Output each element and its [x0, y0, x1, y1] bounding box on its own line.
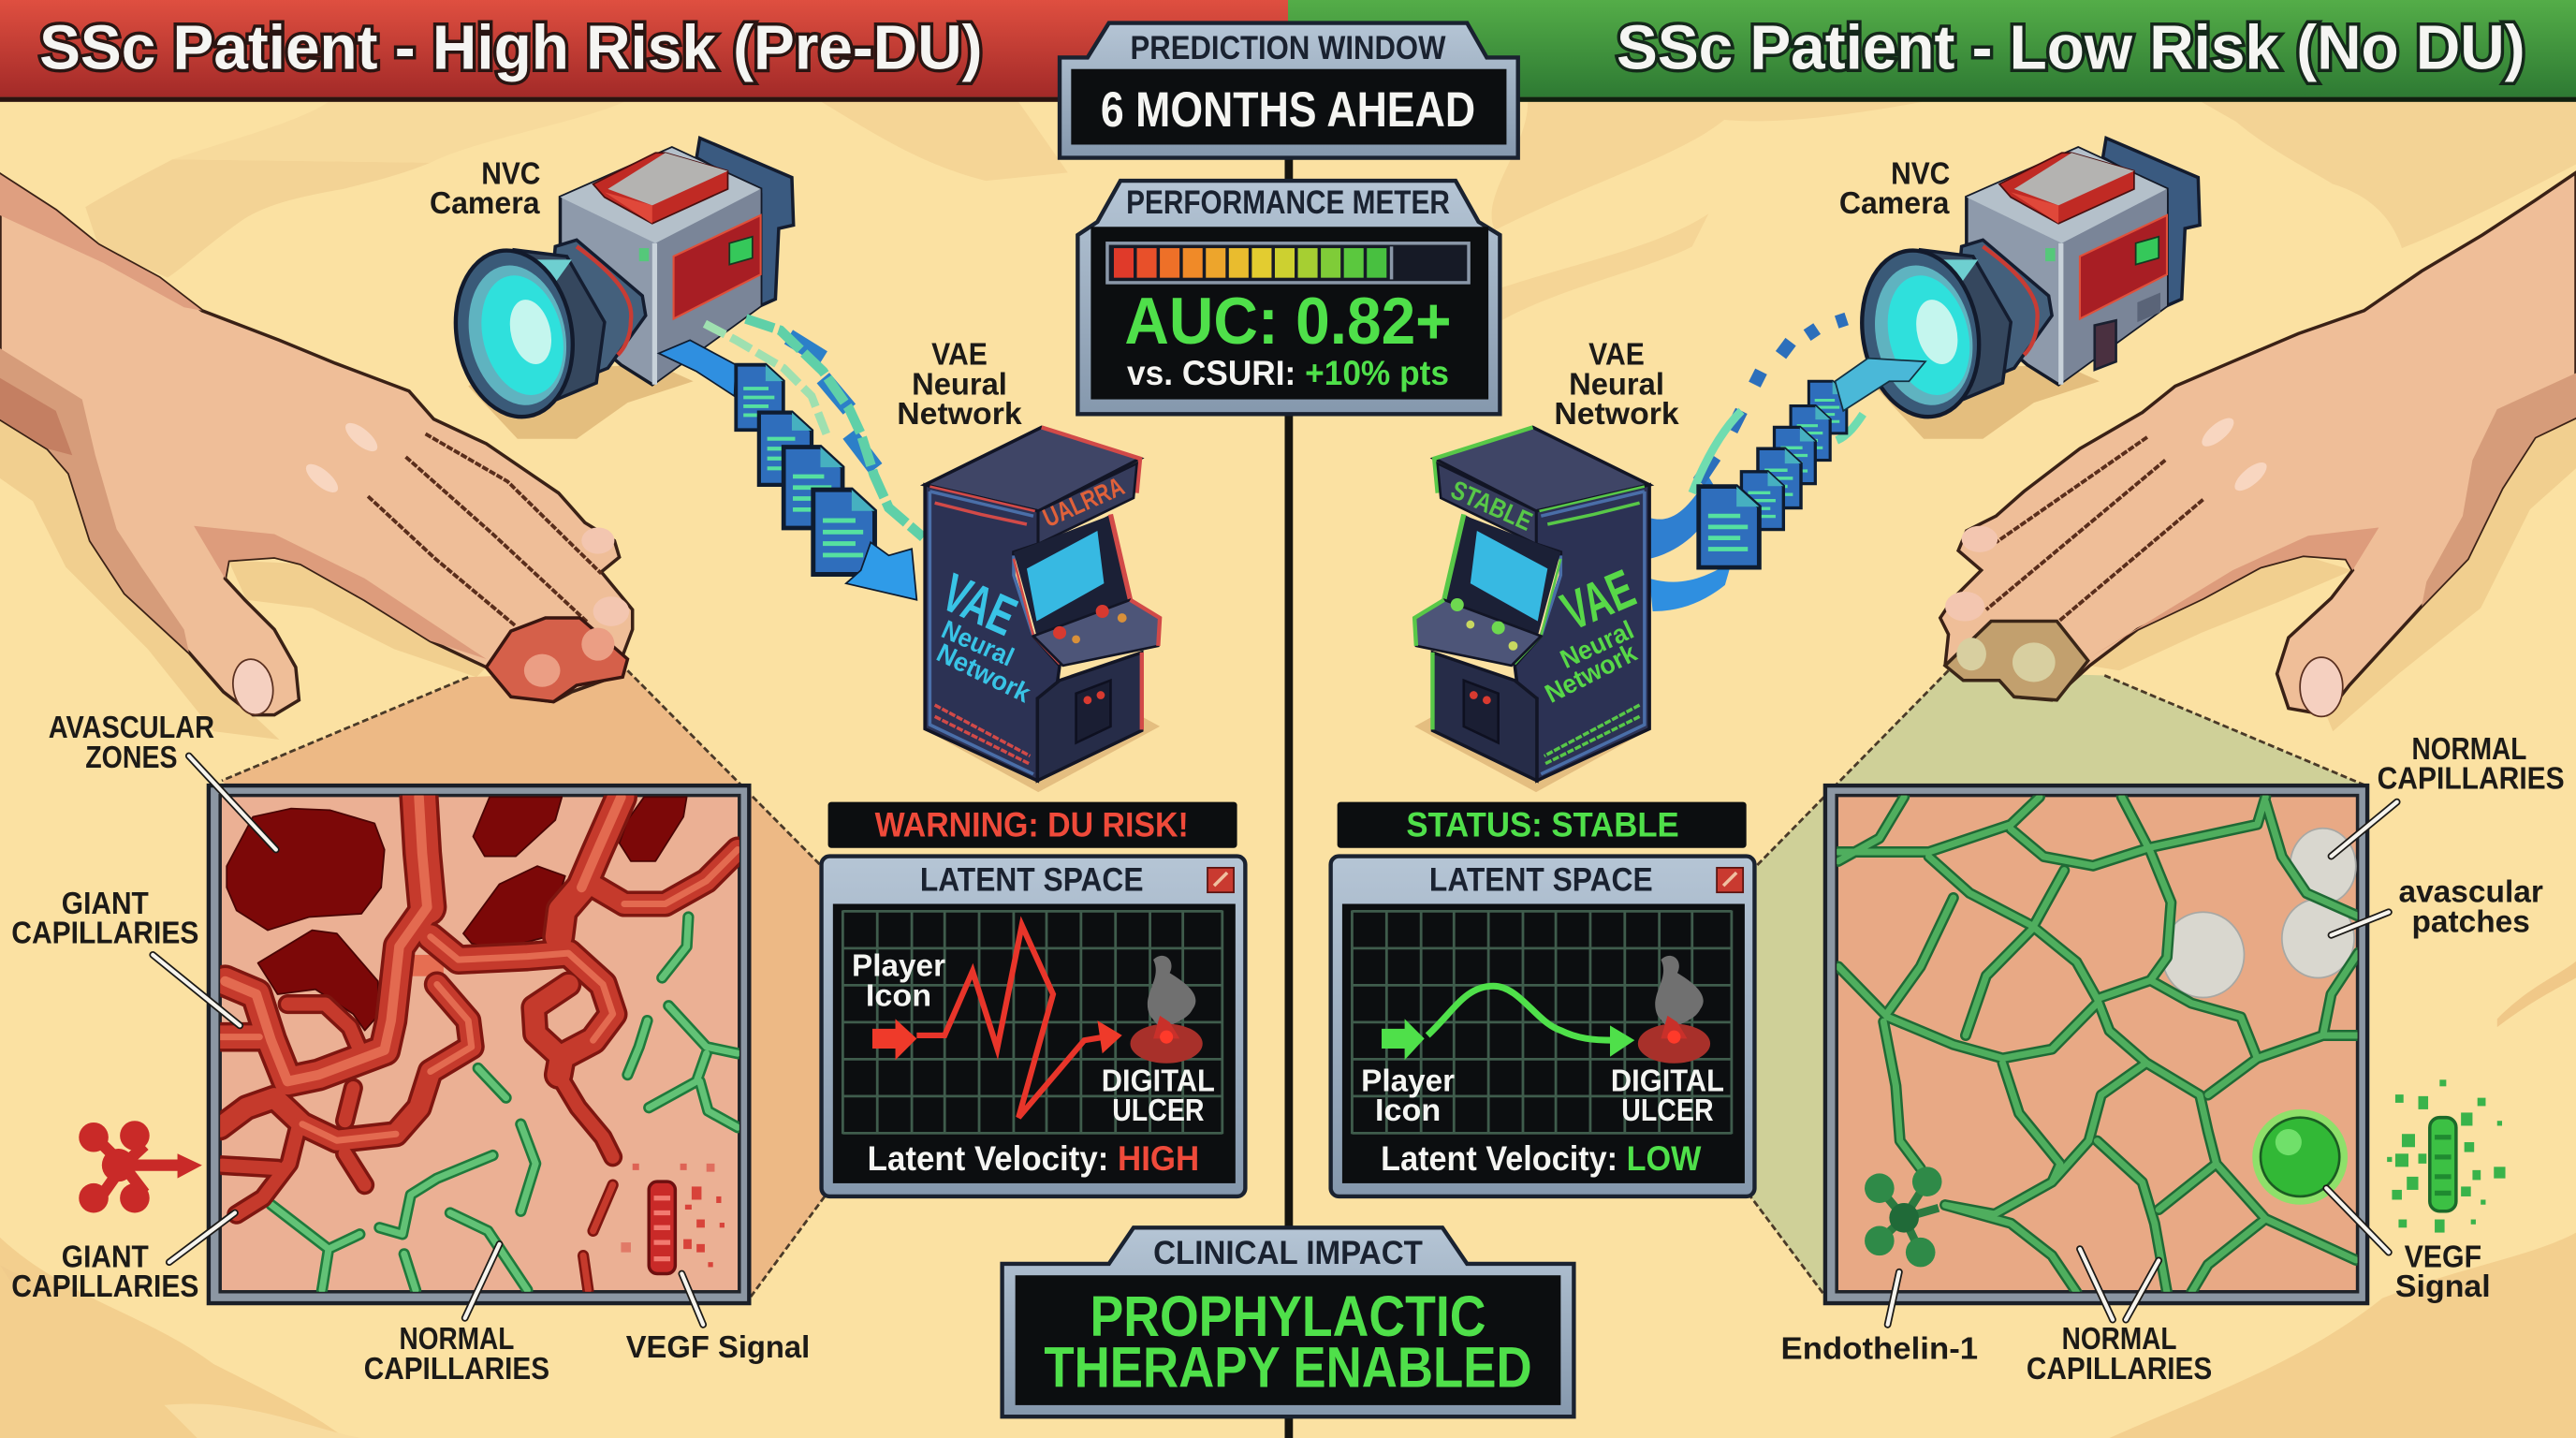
- label: avascular zones: AVASCULAR: [49, 711, 214, 745]
- cabinet text: right: VAE: [1554, 559, 1644, 642]
- comparison: vs. CSURI: +10% pts: [1127, 354, 1449, 392]
- avascular zones: [227, 797, 687, 1031]
- icon: green endothelin: [1865, 1167, 1942, 1267]
- cabinet text: right: Neural: [1556, 615, 1638, 674]
- label: normal capillaries left: [364, 1244, 549, 1387]
- label: NVC camera right: Camera: [1839, 186, 1950, 221]
- cabinet text: left: VAE: [933, 563, 1025, 648]
- labels: DIGITAL: [1102, 1064, 1215, 1099]
- hand: left: [0, 174, 633, 718]
- label: normal capillaries bottom right: [2027, 1249, 2212, 1387]
- label: VAE network right: VAE: [1588, 338, 1645, 373]
- label: giant capillaries upper: [11, 887, 240, 1025]
- label: avascular patches: [2331, 875, 2543, 939]
- hand: right: [1940, 172, 2576, 716]
- fingertips: normal tan: [1945, 622, 2088, 700]
- grid: [1352, 911, 1732, 1134]
- trajectory: [872, 925, 1122, 1118]
- label: giant capillaries upper: CAPILLARIES: [11, 917, 198, 951]
- heading: PERFORMANCE METER: [1126, 184, 1450, 221]
- panel: performance meter: [1077, 181, 1500, 414]
- label: VEGF signal left: VEGF Signal: [626, 1330, 810, 1365]
- label: VAE network left: VAE: [931, 338, 988, 373]
- panel: prediction window: [1060, 23, 1518, 158]
- normal capillaries: short segments: [271, 917, 738, 1290]
- label: NVC camera right: [1839, 157, 1950, 221]
- labels: ULCER: [1621, 1093, 1714, 1128]
- value: 6 MONTHS AHEAD: [1101, 82, 1475, 138]
- labels: ULCER: [1112, 1093, 1204, 1128]
- ulcer icon: [1638, 956, 1710, 1064]
- label: VEGF signal right: VEGF: [2405, 1240, 2481, 1274]
- marquee text: left: UALRRA: [1039, 472, 1129, 533]
- arcade cabinet: right: [1414, 427, 1649, 792]
- AUC value: AUC: 0.82+: [1124, 284, 1452, 358]
- VEGF signal: red capsule: [621, 1164, 724, 1273]
- heading: LATENT SPACE: [920, 861, 1144, 898]
- warning banner: [828, 802, 1237, 848]
- label: VAE network left: Network: [897, 397, 1022, 432]
- icon: green cell: [2252, 1109, 2348, 1205]
- icon: endothelin-1 red molecule: [79, 1121, 202, 1213]
- giant capillaries: [220, 797, 738, 1290]
- label: VAE network right: Neural: [1569, 367, 1664, 402]
- title: high risk: SSc Patient - High Risk (Pre-DU): [39, 14, 983, 83]
- latent velocity: Latent Velocity: HIGH: [868, 1139, 1199, 1178]
- camera: left: [443, 138, 794, 439]
- header: low risk: [1288, 0, 2576, 102]
- meter bar: [1107, 243, 1469, 283]
- label: VEGF signal left: [626, 1273, 810, 1365]
- message: THERAPY ENABLED: [1044, 1336, 1532, 1401]
- labels: [1611, 1064, 1724, 1128]
- label: normal capillaries top right: [2331, 732, 2565, 857]
- heading: CLINICAL IMPACT: [1153, 1235, 1423, 1271]
- label: giant capillaries lower: GIANT: [62, 1240, 149, 1274]
- status banner: [1338, 802, 1747, 848]
- panel: latent space high: [822, 857, 1245, 1196]
- normal capillary network: [1838, 797, 2358, 1292]
- label: giant capillaries lower: CAPILLARIES: [11, 1269, 198, 1304]
- title: low risk: SSc Patient - Low Risk (No DU): [1617, 14, 2525, 83]
- labels: Player: [1361, 1064, 1455, 1099]
- cabinet text: right: Network: [1540, 638, 1642, 709]
- ulcer icon: [1131, 956, 1203, 1064]
- label: NVC camera left: NVC: [481, 157, 540, 192]
- panel: latent space low: [1331, 857, 1754, 1196]
- zoom cone: left: [222, 670, 825, 1297]
- warning banner: WARNING: DU RISK!: [875, 806, 1189, 844]
- close button: [1717, 868, 1743, 892]
- label: NVC camera right: NVC: [1891, 157, 1950, 192]
- cabinet text: left: Network: [932, 638, 1035, 708]
- cabinet text: left: Neural: [937, 615, 1018, 672]
- label: normal capillaries bottom right: NORMAL: [2062, 1322, 2177, 1357]
- cabinet text: left: [932, 563, 1035, 708]
- label: giant capillaries upper: GIANT: [62, 887, 149, 921]
- avascular patches: [2162, 829, 2356, 998]
- label: VEGF signal right: [2326, 1188, 2491, 1304]
- marquee text: right: STABLE: [1447, 475, 1537, 536]
- label: normal capillaries top right: NORMAL: [2411, 732, 2526, 767]
- header: high risk: [0, 0, 1288, 102]
- labels: Player: [852, 949, 945, 984]
- label: NVC camera left: [430, 157, 540, 221]
- labels: [852, 949, 945, 1013]
- data stream: left: [659, 319, 923, 600]
- zoom cone: right: [1748, 670, 2365, 1299]
- center divider: [1284, 98, 1293, 1438]
- heading: LATENT SPACE: [1429, 861, 1653, 898]
- label: avascular zones: ZONES: [85, 741, 178, 775]
- label: VAE network right: [1554, 338, 1679, 432]
- message: PROPHYLACTIC: [1090, 1284, 1486, 1349]
- label: normal capillaries bottom right: CAPILLARIES: [2027, 1352, 2212, 1387]
- capillary view: right: [1825, 785, 2367, 1303]
- label: avascular zones: [49, 711, 276, 850]
- label: VAE network left: [897, 338, 1022, 432]
- label: normal capillaries left: CAPILLARIES: [364, 1352, 549, 1387]
- close button: [1208, 868, 1234, 892]
- label: avascular patches: avascular: [2398, 875, 2543, 910]
- grid: [842, 911, 1222, 1134]
- data stream: right: [1649, 319, 1925, 611]
- arcade cabinet: left: [925, 427, 1160, 792]
- labels: Icon: [866, 978, 931, 1013]
- labels: DIGITAL: [1611, 1064, 1724, 1099]
- message: [1044, 1284, 1532, 1401]
- label: NVC camera left: Camera: [430, 186, 540, 221]
- fingertips: ischemic red: [487, 618, 627, 702]
- labels: [1102, 1064, 1215, 1128]
- label: VAE network left: Neural: [912, 367, 1007, 402]
- capillary view: left: [209, 785, 749, 1303]
- latent velocity: Latent Velocity: LOW: [1381, 1139, 1702, 1178]
- label: giant capillaries lower: [11, 1213, 235, 1304]
- label: VAE network right: Network: [1554, 397, 1679, 432]
- trajectory: [1382, 986, 1634, 1060]
- label: VEGF signal right: Signal: [2395, 1269, 2491, 1304]
- label: normal capillaries left: NORMAL: [399, 1322, 514, 1357]
- label: endothelin-1: Endothelin-1: [1781, 1332, 1978, 1367]
- label: endothelin-1: [1781, 1272, 1978, 1367]
- panel: clinical impact: [1003, 1227, 1573, 1416]
- cabinet text: right: [1540, 559, 1644, 709]
- VEGF signal: green capsule: [2387, 1079, 2506, 1233]
- camera: right: [1850, 138, 2200, 439]
- status banner: STATUS: STABLE: [1406, 806, 1679, 844]
- labels: [1361, 1064, 1455, 1128]
- heading: PREDICTION WINDOW: [1131, 30, 1446, 66]
- labels: Icon: [1375, 1093, 1441, 1128]
- label: avascular patches: patches: [2411, 904, 2530, 939]
